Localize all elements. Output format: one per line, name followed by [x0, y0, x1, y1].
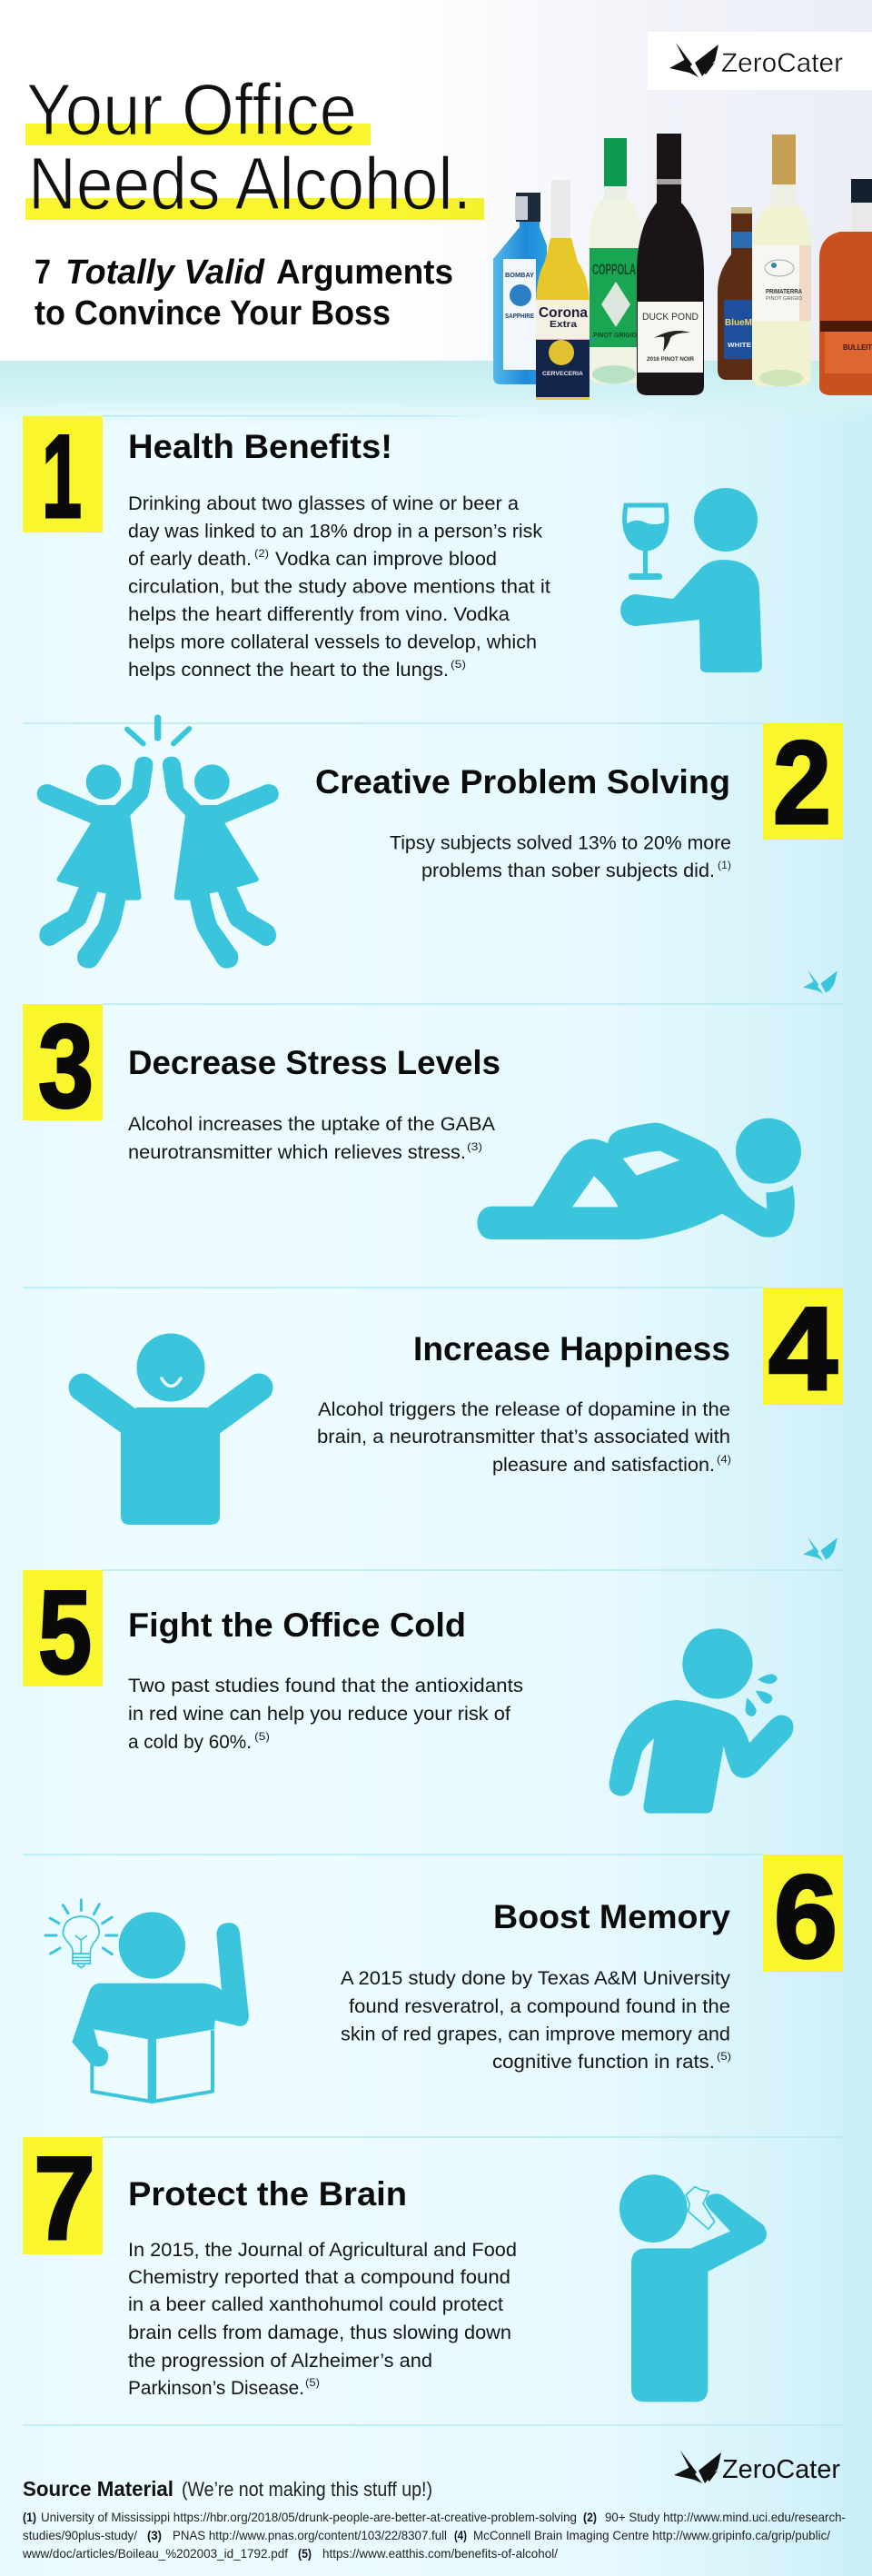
source list: (2) [583, 2510, 597, 2524]
source heading: Source Material [23, 2477, 173, 2501]
text block: In 2015, the Journal of Agricultural and Food [128, 2239, 517, 2261]
heading: Boost Memory [493, 1898, 730, 1935]
bottle: gin: SAPPHIRE [505, 313, 534, 320]
logo: bottom [674, 2451, 840, 2484]
source list: University of Mississippi https://hbr.org/2018/05/drunk-people-are-better-at-creative-problem-solving [41, 2510, 577, 2524]
panel: 1 health benefits [23, 410, 762, 681]
text block: (1) [718, 859, 731, 871]
heading: Decrease Stress Levels [128, 1044, 500, 1081]
source list: McConnell Brain Imaging Centre http://www.gripinfo.ca/grip/public/ [473, 2528, 830, 2542]
source list: (5) [298, 2546, 312, 2561]
text block: neurotransmitter which relieves stress. [128, 1141, 466, 1163]
text block: brain, a neurotransmitter that’s associated with [317, 1426, 730, 1447]
text block: Two past studies found that the antioxidants [128, 1675, 523, 1696]
text block: in a beer called xanthohumol could protect [128, 2293, 503, 2315]
bottle: gin: BOMBAY [505, 273, 534, 279]
icon: person sneezing [609, 1628, 793, 1814]
heading: Creative Problem Solving [315, 763, 730, 801]
text block: brain cells from damage, thus slowing down [128, 2322, 511, 2343]
source list: www/doc/articles/Boileau_%202003_id_1792.pdf [22, 2546, 288, 2561]
text block: helps the heart differently from vino. Vodka [128, 603, 510, 625]
text block [128, 1675, 523, 1753]
text block: skin of red grapes, can improve memory and [341, 2023, 730, 2044]
text block: the progression of Alzheimer’s and [128, 2350, 432, 2372]
panel: 6 boost memory [45, 1850, 843, 2103]
panel: 5 fight the office cold [23, 1566, 793, 1814]
bottle: pale white wine [752, 134, 811, 386]
text block: (3) [467, 1140, 482, 1153]
bottle: white wine, green label: COPPOLA [592, 261, 636, 278]
number badge 7: 7 [34, 2132, 95, 2264]
text block: helps connect the heart to the lungs. [128, 659, 449, 681]
panel: 4 increase happiness [83, 1282, 843, 1561]
icon: person holding wine glass [620, 488, 762, 672]
icon: crane logo [669, 43, 718, 77]
bottle: beer, yellow: CERVECERIA [542, 372, 584, 377]
bottle: blue beer: BlueM [725, 318, 752, 328]
source heading [23, 2477, 432, 2501]
icon: two figures high-fiving [37, 718, 279, 969]
source list: PNAS http://www.pnas.org/content/103/22/8307.full [173, 2528, 447, 2542]
bottle: white wine, green label [590, 138, 642, 383]
text block: (5) [254, 1730, 270, 1743]
number badge 3: 3 [38, 1000, 94, 1132]
text block: found resveratrol, a compound found in the [349, 1995, 730, 2017]
text block: Vodka can improve blood [275, 548, 497, 570]
text block: A 2015 study done by Texas A&M University [341, 1967, 730, 1989]
icon: person reading with light bulb [45, 1900, 249, 2103]
panel: 3 decrease stress levels [23, 1000, 801, 1239]
text block: Alcohol triggers the release of dopamine in the [318, 1398, 730, 1420]
title: Needs Alcohol. [28, 143, 471, 225]
source list: (3) [147, 2528, 162, 2542]
title [25, 69, 484, 225]
bottle: beer, yellow: Corona [539, 305, 588, 321]
text block: (5) [717, 2050, 731, 2063]
text block [128, 2239, 517, 2399]
text block: circulation, but the study above mentions that it [128, 576, 550, 598]
text block: (5) [305, 2376, 320, 2389]
text block: Alcohol increases the uptake of the GABA [128, 1113, 496, 1135]
bottle: gin [493, 193, 547, 384]
subtitle: Totally Valid [65, 254, 265, 292]
bottle: beer, yellow: Extra [550, 320, 578, 330]
bottle: pale white wine: PRIMATERRA [766, 289, 802, 295]
text block [128, 1113, 496, 1163]
bottle: blue beer: WHITE [728, 343, 751, 349]
number badge 2: 2 [773, 716, 831, 849]
text block: problems than sober subjects did. [421, 860, 715, 881]
source list: (4) [454, 2528, 467, 2542]
text block: Tipsy subjects solved 13% to 20% more [390, 832, 731, 854]
heading: Protect the Brain [128, 2175, 407, 2213]
logo box: top [648, 32, 872, 90]
text block: cognitive function in rats. [492, 2051, 715, 2073]
source list [22, 2510, 846, 2561]
bottle: pale white wine: PINOT GRIGIO [766, 296, 802, 302]
text block: (4) [717, 1453, 731, 1466]
bottle: blue beer [718, 207, 752, 380]
text block: of early death. [128, 548, 252, 570]
text block: (2) [254, 547, 269, 560]
source list: https://www.eatthis.com/benefits-of-alcohol/ [322, 2546, 558, 2561]
number badge 5: 5 [38, 1566, 92, 1698]
number badge 4: 4 [768, 1282, 837, 1415]
number badge 1: 1 [42, 410, 82, 542]
bottle: white wine, green label: PINOT GRIGIO [593, 333, 638, 339]
source list: 90+ Study http://www.mind.uci.edu/research- [605, 2510, 846, 2524]
bottle: red wine: 2016 PINOT NOIR [647, 357, 695, 363]
subtitle: to Convince Your Boss [35, 294, 391, 333]
icon: happy person arms raised [83, 1334, 259, 1525]
panel: 7 protect the brain [23, 2132, 767, 2402]
title: Your Office [26, 69, 357, 150]
heading: Health Benefits! [128, 428, 392, 465]
panel: 2 creative problem solving [37, 716, 843, 994]
icon: crane logo [674, 2451, 721, 2483]
number badge 6: 6 [774, 1850, 837, 1983]
subtitle: Arguments [276, 254, 453, 292]
bottle: bourbon [819, 179, 872, 395]
logo wordmark: ZeroCater [722, 2455, 840, 2484]
text block: Drinking about two glasses of wine or beer a [128, 492, 519, 514]
text block [317, 1398, 731, 1476]
subtitle [35, 254, 453, 333]
source material [22, 2477, 846, 2561]
heading: Fight the Office Cold [128, 1606, 466, 1644]
icon: person drinking from bottle [619, 2174, 767, 2402]
source heading: (We’re not making this stuff up!) [182, 2478, 432, 2501]
subtitle: 7 [35, 254, 51, 292]
text block: pleasure and satisfaction. [492, 1454, 715, 1476]
text block: in red wine can help you reduce your risk of [128, 1703, 510, 1725]
text block [390, 832, 731, 881]
hero photo: bottles [493, 134, 872, 400]
heading: Increase Happiness [413, 1330, 730, 1368]
bottle: red wine [637, 134, 704, 395]
text block: Parkinson’s Disease. [128, 2377, 304, 2399]
text block: day was linked to an 18% drop in a person’s risk [128, 520, 542, 542]
bottle: beer, yellow [536, 180, 590, 400]
source list: (1) [23, 2510, 36, 2524]
icon: person lying down [477, 1119, 801, 1239]
logo wordmark: ZeroCater [721, 48, 843, 78]
text block: a cold by 60%. [128, 1731, 252, 1753]
bottle: red wine: DUCK POND [642, 312, 699, 323]
source list: studies/90plus-study/ [23, 2528, 137, 2542]
text block: (5) [451, 658, 466, 671]
icon: small crane [803, 1537, 837, 1561]
text block: Chemistry reported that a compound found [128, 2266, 510, 2288]
icon: small crane [803, 970, 837, 994]
text block [128, 492, 550, 681]
text block [341, 1967, 731, 2073]
text block: helps more collateral vessels to develop, which [128, 631, 537, 652]
